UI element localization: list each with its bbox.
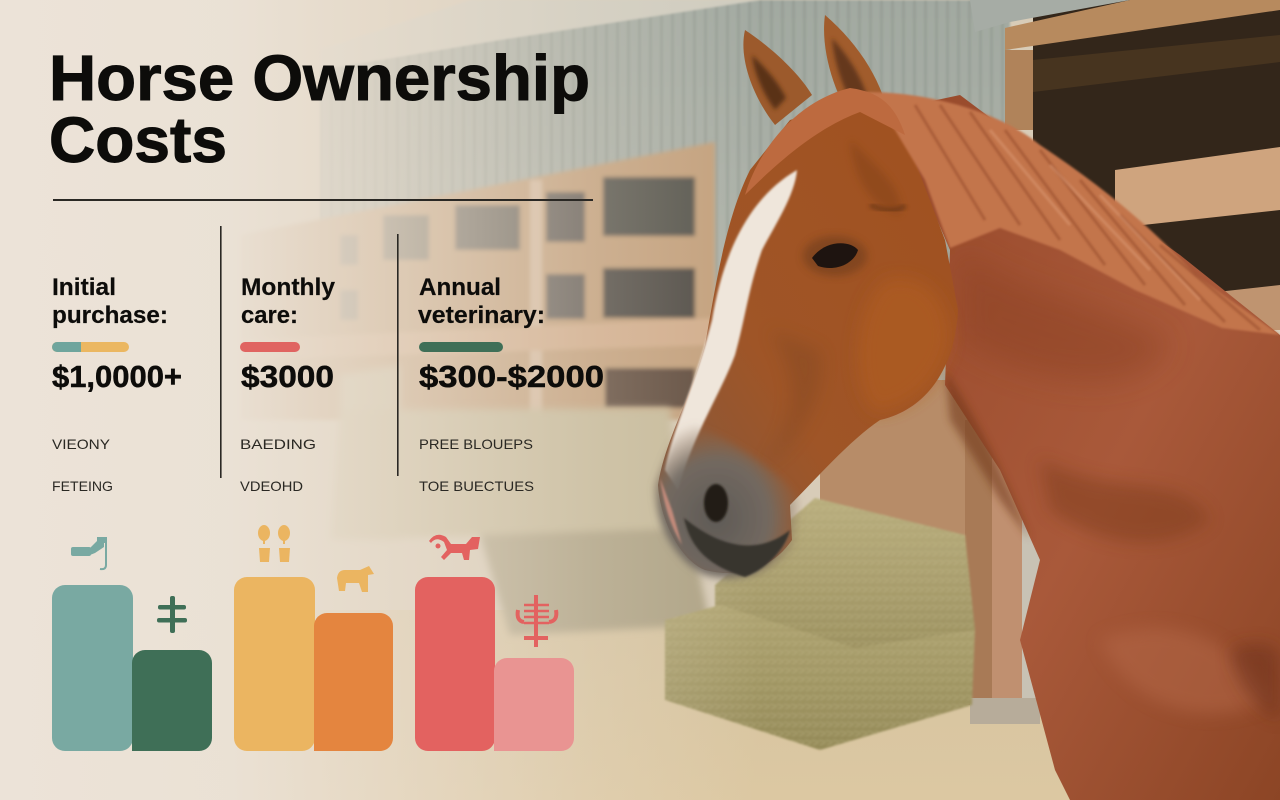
column: annual veterinary: PREE BLOUEPS bbox=[419, 436, 533, 452]
horse bbox=[655, 15, 1280, 800]
forelock bbox=[745, 88, 905, 195]
bar group: red and pink bbox=[415, 577, 574, 751]
column: monthly care: care: bbox=[241, 302, 298, 329]
column: monthly care: VDEOHD bbox=[240, 478, 303, 494]
horse neck and body bbox=[890, 95, 1280, 800]
wooden stall fronts bbox=[240, 142, 715, 420]
icon: red horse bbox=[429, 535, 480, 560]
column: monthly care: BAEDING bbox=[240, 436, 316, 452]
column: initial purchase: Initial bbox=[52, 274, 116, 301]
bar group: yellow and orange bbox=[234, 577, 393, 751]
column: initial purchase: VIEONY bbox=[52, 436, 111, 452]
column: annual veterinary: TOE BUECTUES bbox=[419, 478, 534, 494]
white blaze bbox=[665, 170, 797, 490]
column: initial purchase: FETEING bbox=[52, 478, 113, 494]
wooden wall behind horse bbox=[820, 380, 1042, 724]
icon: grooming tool bbox=[71, 537, 107, 569]
title: Horse Ownership bbox=[49, 42, 590, 114]
barn door opening top right bbox=[970, 0, 1280, 330]
pill: teal and yellow bbox=[52, 342, 129, 352]
column: monthly care bbox=[240, 274, 336, 494]
column: monthly care: $3000 bbox=[241, 359, 334, 394]
title bbox=[49, 42, 590, 176]
blurred hay stack bbox=[330, 365, 710, 635]
pill: red bbox=[240, 342, 300, 352]
column: initial purchase: $1,0000+ bbox=[52, 359, 182, 394]
bar group: teal and green bbox=[52, 585, 212, 751]
icon: plus cross bbox=[157, 596, 187, 633]
title: Costs bbox=[49, 104, 227, 176]
column: annual veterinary: $300-$2000 bbox=[419, 359, 604, 394]
neck shading bbox=[945, 250, 1280, 720]
horse muzzle bbox=[655, 420, 800, 578]
horse ears bbox=[743, 15, 890, 130]
jowl shade bbox=[857, 278, 950, 412]
column: monthly care: Monthly bbox=[241, 274, 336, 301]
column: initial purchase bbox=[52, 274, 182, 494]
icon: red skeleton stand bbox=[518, 595, 556, 647]
column: annual veterinary bbox=[418, 274, 604, 494]
mane bbox=[865, 92, 1280, 335]
ground bbox=[0, 610, 1080, 800]
icon: small horse bbox=[337, 566, 374, 592]
icon: potted plants bbox=[258, 525, 290, 562]
pill: green bbox=[419, 342, 503, 352]
left fade overlay bbox=[0, 0, 760, 800]
column: annual veterinary: veterinary: bbox=[418, 302, 545, 329]
hay bales in front bbox=[665, 498, 975, 750]
column: annual veterinary: Annual bbox=[419, 274, 501, 301]
mane strands bbox=[915, 105, 1260, 330]
barn corrugated wall bbox=[320, 0, 1010, 400]
horse eye bbox=[803, 205, 905, 276]
horse head bbox=[658, 100, 958, 573]
column: initial purchase: purchase: bbox=[52, 302, 168, 329]
